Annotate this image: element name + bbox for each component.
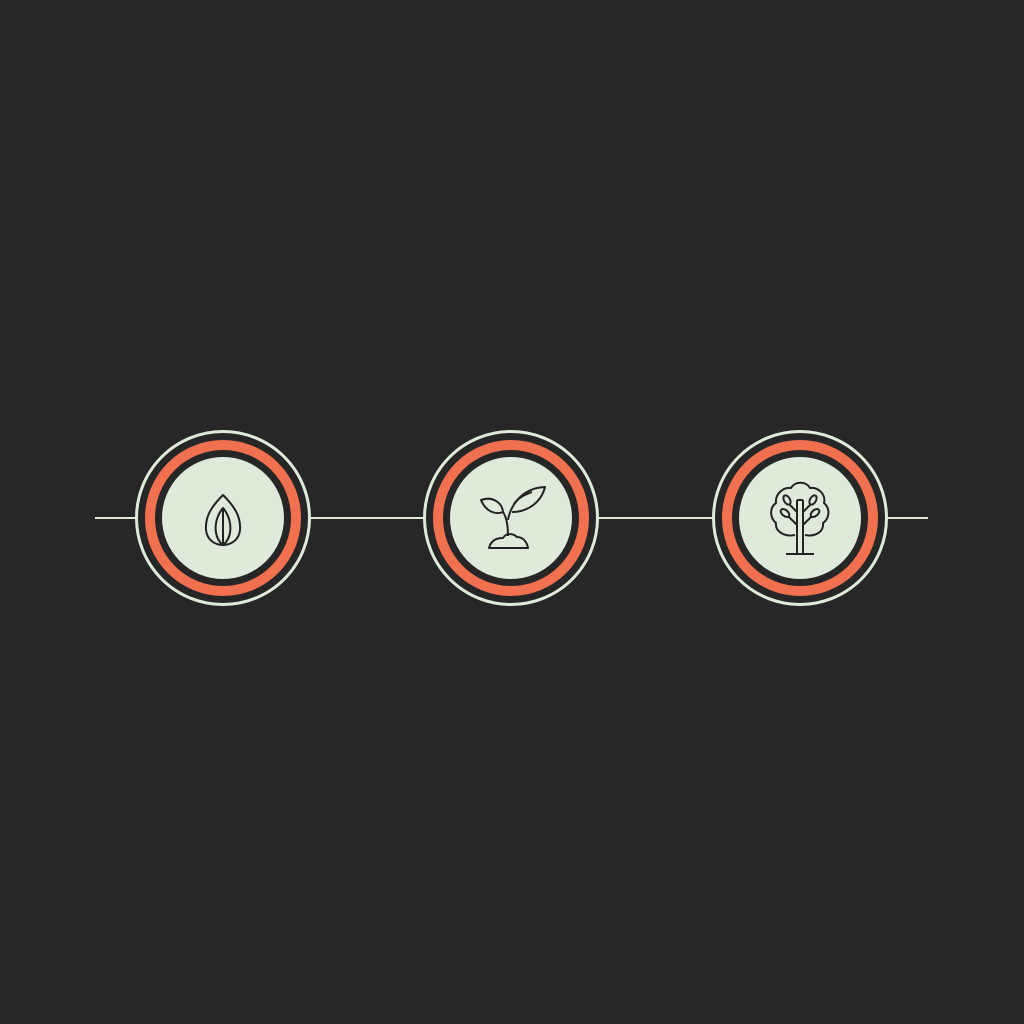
stage 1: seed <box>136 432 310 604</box>
stage 2: sprout <box>424 432 598 604</box>
stage 3: tree <box>714 432 886 604</box>
icon: sprout <box>481 487 545 548</box>
timeline line <box>95 517 928 519</box>
icon: tree <box>771 483 828 554</box>
icon: seed <box>206 495 240 545</box>
